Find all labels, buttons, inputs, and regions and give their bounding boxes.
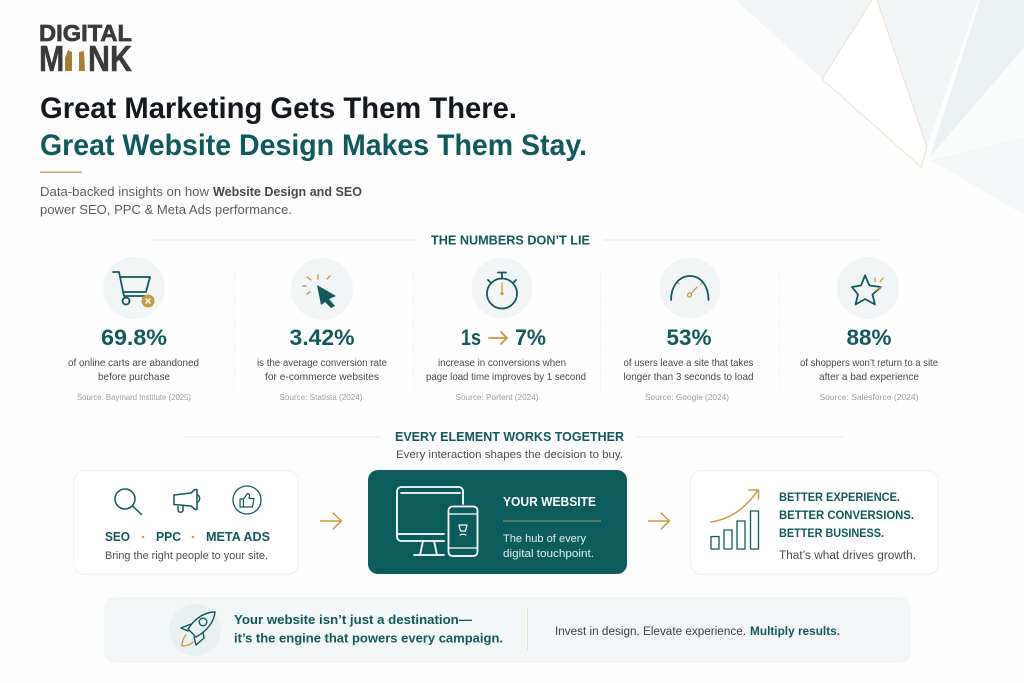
channel labels: PPC	[156, 530, 181, 544]
panel: better results: BETTER CONVERSIONS.	[779, 508, 914, 522]
icon: cart	[103, 257, 165, 319]
stat: bad experience: Source: Salesforce (2024)	[820, 392, 919, 402]
heading: every element works together: Every interaction shapes the decision to buy.	[396, 449, 623, 461]
icon: star	[837, 257, 899, 319]
panel: marketing channels	[74, 470, 298, 574]
stat: bad experience: after a bad experience	[819, 371, 919, 383]
stat: slow loading: 53%	[666, 325, 712, 350]
channel labels: SEO	[105, 530, 130, 544]
value with arrow	[461, 325, 546, 350]
channel labels	[105, 530, 270, 544]
stat: abandoned carts: of online carts are abandoned	[68, 357, 199, 369]
panel: better results: BETTER BUSINESS.	[779, 526, 884, 540]
panel: better results	[690, 470, 938, 574]
logo	[39, 20, 132, 79]
panel: better results: BETTER EXPERIENCE.	[779, 490, 900, 504]
panel: bottom banner: Invest in design. Elevate experience.	[555, 626, 746, 638]
panel: bottom banner	[104, 597, 911, 663]
stat: conversion rate: for e-commerce websites	[265, 371, 379, 383]
icon: search	[115, 489, 142, 514]
stat: slow loading: Source: Google (2024)	[645, 392, 729, 402]
stat: page load: Source: Portent (2024)	[456, 392, 539, 402]
panel: your website: The hub of every	[503, 533, 586, 545]
panel: bottom banner: Multiply results.	[750, 626, 840, 638]
title: Great Website Design Makes Them Stay.	[40, 129, 587, 162]
stat: bad experience: of shoppers won’t return to a site	[800, 357, 938, 369]
channel labels: META ADS	[206, 530, 270, 544]
arrow	[648, 513, 670, 529]
title: Great Marketing Gets Them There.	[40, 92, 517, 125]
panel: your website: YOUR WEBSITE	[503, 495, 596, 509]
heading: every element works together	[185, 430, 843, 461]
value with arrow: 1s	[461, 325, 481, 350]
stat: conversion rate	[257, 258, 387, 402]
panel: your website	[368, 470, 627, 574]
arrow	[320, 513, 342, 529]
icon: thumbs up	[233, 486, 261, 514]
stat: abandoned carts	[68, 257, 199, 402]
logo: MONK	[39, 38, 132, 79]
stat: page load: increase in conversions when	[438, 357, 566, 369]
panel: bottom banner: Your website isn’t just a destination—	[234, 612, 472, 627]
subtitle: Website Design and SEO	[213, 184, 362, 199]
stat: slow loading	[624, 258, 754, 402]
icon: speedometer	[660, 258, 720, 318]
stat: bad experience: 88%	[846, 325, 892, 350]
icon: megaphone	[174, 490, 200, 512]
stat: conversion rate: 3.42%	[290, 325, 354, 350]
icon: rocket	[169, 604, 221, 656]
subtitle: Data-backed insights on how	[40, 184, 210, 199]
subtitle: power SEO, PPC & Meta Ads performance.	[40, 202, 292, 217]
stat: slow loading: of users leave a site that takes	[624, 357, 754, 369]
stat: abandoned carts: Source: Baymard Institute (2025)	[77, 392, 191, 402]
panel: bottom banner: it’s the engine that powers every campaign.	[234, 630, 503, 646]
subtitle	[40, 184, 362, 217]
stat: slow loading: longer than 3 seconds to load	[624, 371, 754, 383]
stat: bad experience	[800, 257, 938, 402]
icon: stopwatch	[472, 258, 532, 318]
stat: conversion rate: Source: Statista (2024)	[280, 392, 363, 402]
title	[40, 92, 587, 162]
value with arrow: 7%	[515, 325, 546, 350]
stat: page load	[426, 258, 586, 402]
icon: cursor	[291, 258, 353, 320]
heading: the numbers don't lie: THE NUMBERS DON’T LIE	[431, 234, 590, 248]
icon: growth chart	[711, 490, 758, 549]
panel: marketing channels: Bring the right people to your site.	[105, 550, 268, 562]
stat: conversion rate: is the average conversion rate	[257, 357, 387, 369]
background geometric shapes	[736, 0, 1024, 215]
stat: page load: page load time improves by 1 second	[426, 371, 586, 383]
stat: abandoned carts: 69.8%	[101, 325, 167, 350]
panel: your website: digital touchpoint.	[503, 548, 594, 560]
stat: abandoned carts: before purchase	[98, 371, 170, 383]
panel: better results: That’s what drives growth.	[779, 550, 916, 562]
icon: devices	[397, 487, 478, 556]
heading: every element works together: EVERY ELEMENT WORKS TOGETHER	[395, 430, 624, 444]
logo: DIGITAL	[39, 20, 132, 46]
